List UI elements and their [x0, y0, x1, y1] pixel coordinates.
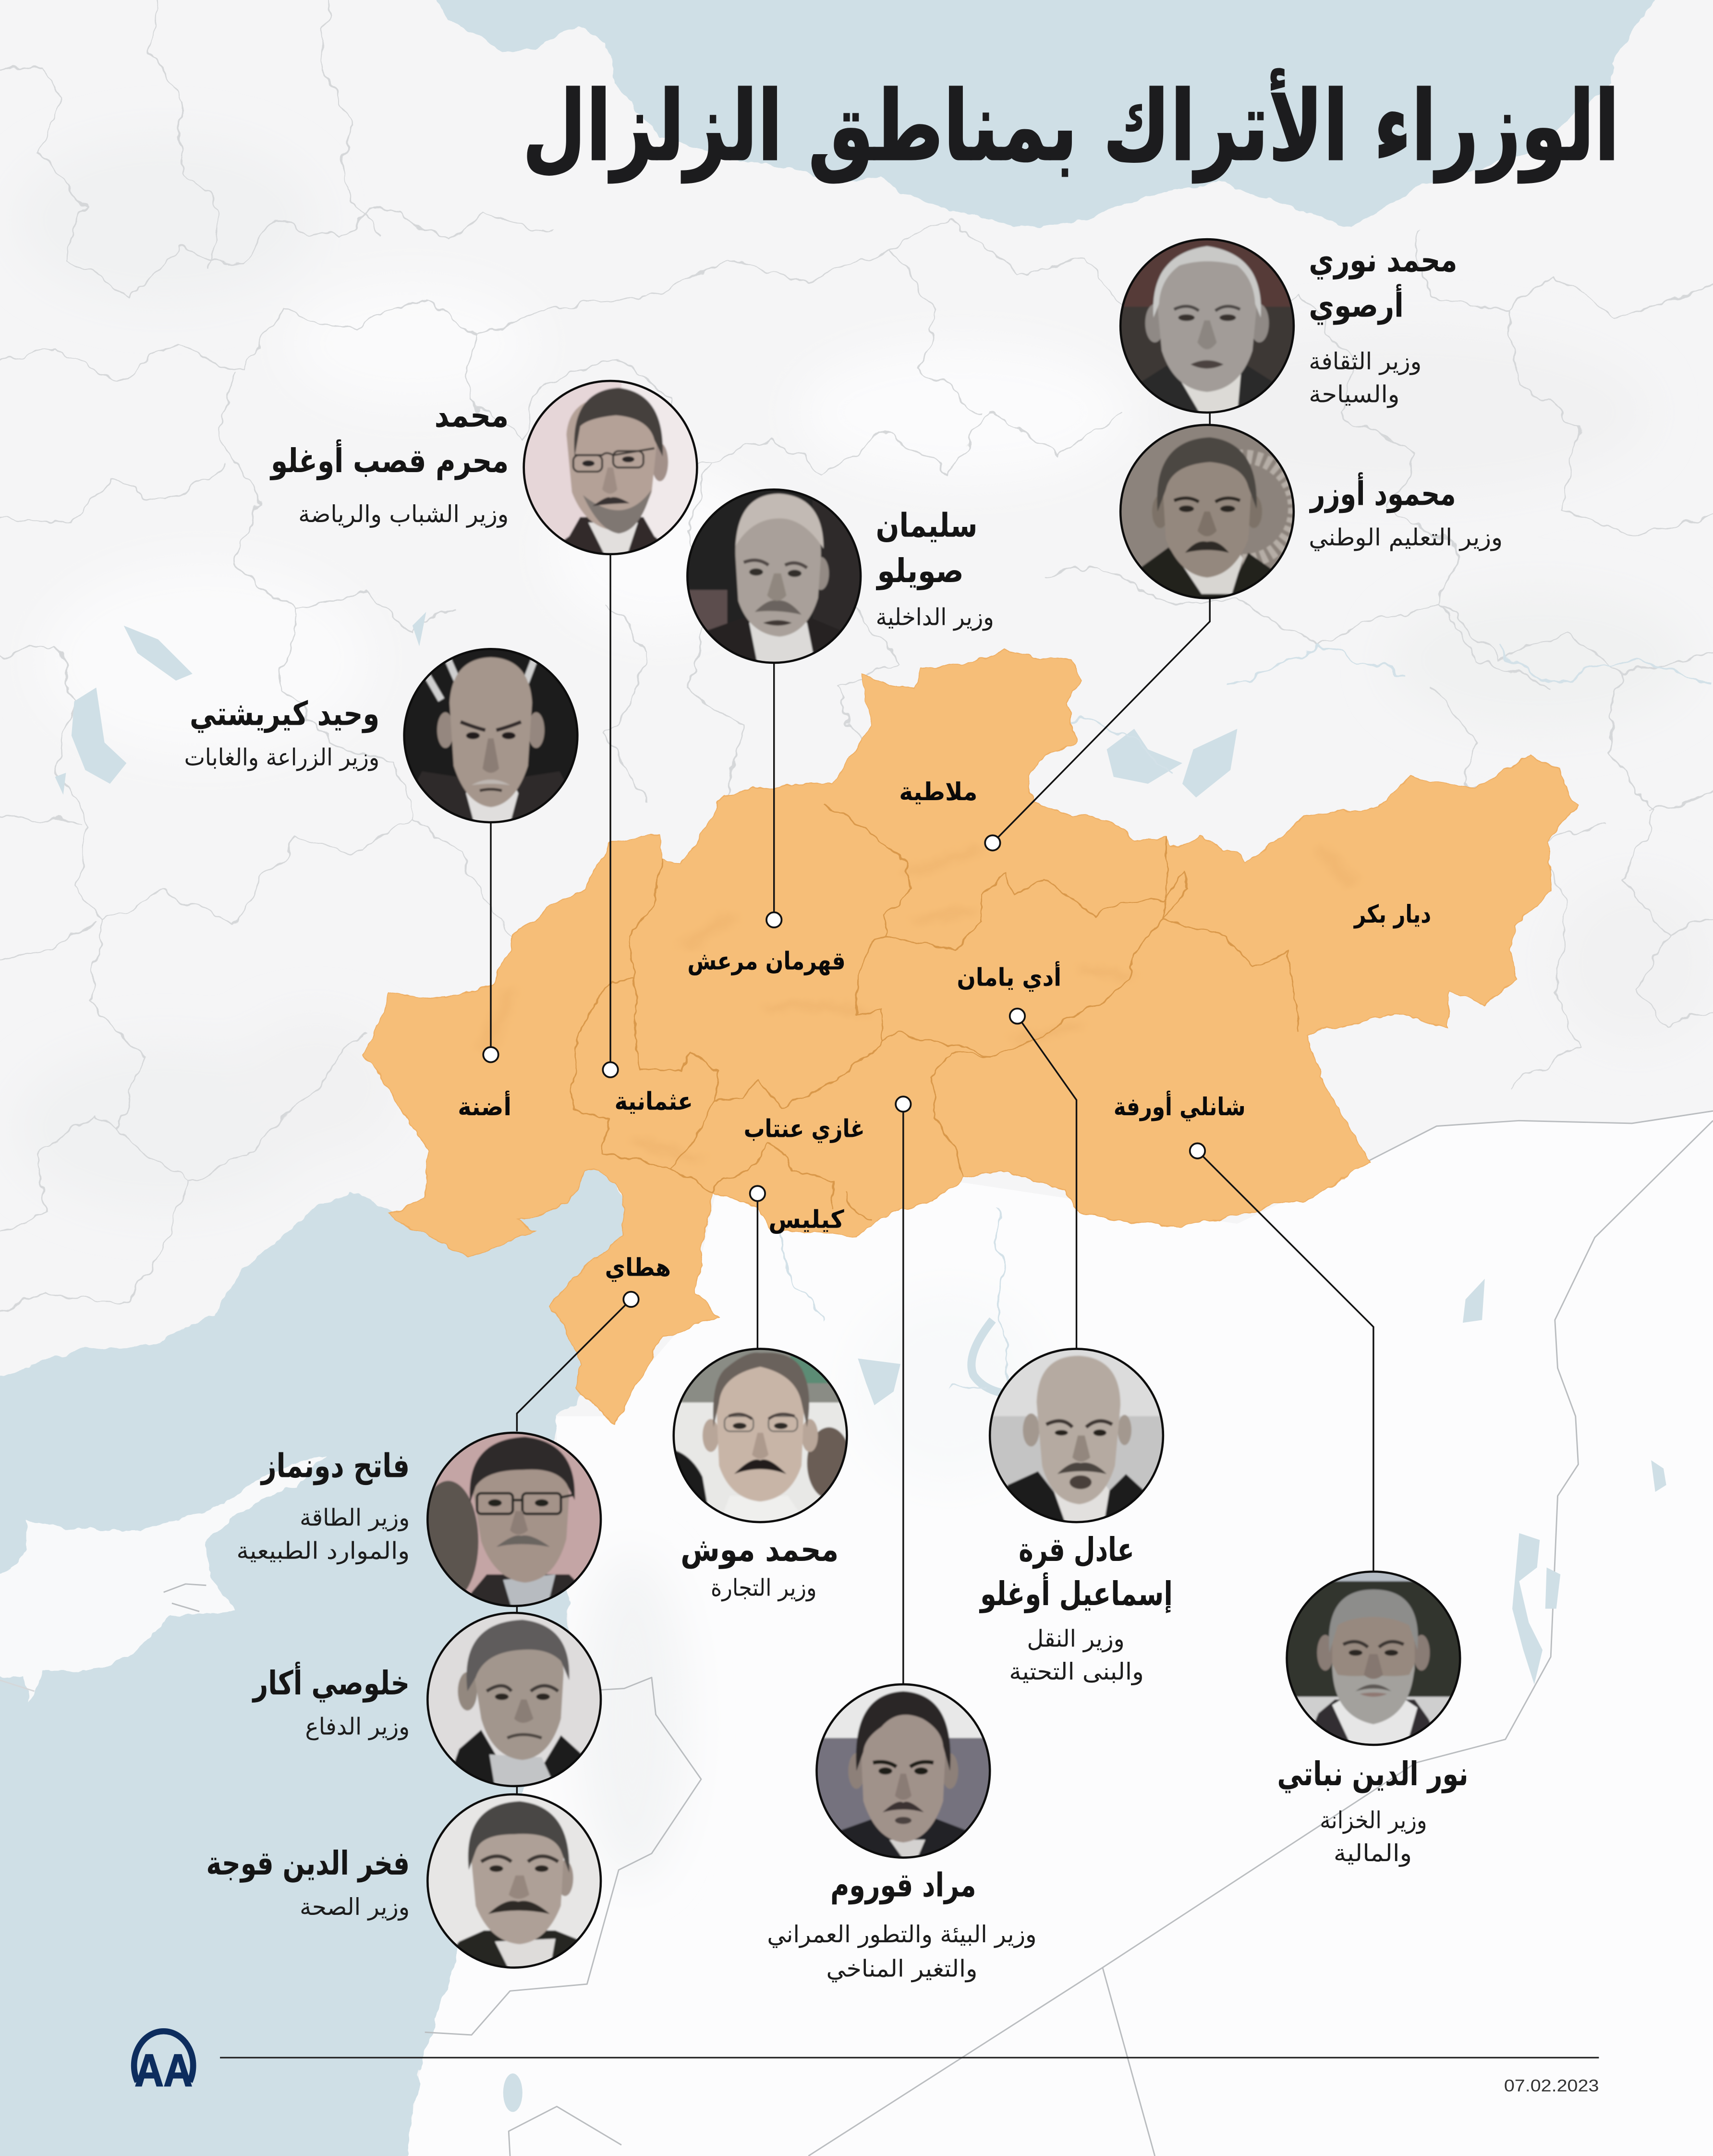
name — [269, 396, 509, 480]
portrait: soylu — [678, 488, 870, 664]
panel: adil karaismailoglu — [979, 1348, 1173, 1685]
panel: vahit kirisci — [184, 647, 587, 824]
panel: mehmet mus — [672, 1348, 851, 1602]
mediterranean sea — [0, 1162, 646, 2156]
role — [236, 1505, 410, 1564]
province labels: أضنة — [458, 1090, 511, 1121]
role — [1009, 1626, 1144, 1685]
role: والسياحة — [1309, 381, 1399, 408]
name — [1309, 241, 1458, 325]
role: وزير التعليم الوطني — [1309, 524, 1503, 551]
name: إسماعيل أوغلو — [979, 1572, 1173, 1613]
province labels — [458, 778, 1431, 1282]
syria and iraq borders — [0, 1121, 1713, 2156]
name: وحيد كيريشتي — [190, 695, 379, 733]
portrait: nebati — [1286, 1570, 1461, 1752]
role: وزير الشباب والرياضة — [298, 501, 509, 528]
panel: mehmet nuri ersoy — [1111, 238, 1458, 414]
portrait: kirisci — [395, 647, 587, 824]
turkey south border — [1369, 1111, 1713, 1160]
panel: fatih donmez — [236, 1431, 602, 1608]
role: والمالية — [1334, 1840, 1412, 1867]
panel: suleyman soylu — [678, 488, 994, 664]
province labels: ملاطية — [899, 778, 977, 806]
panel: mehmet kasapoglu — [269, 379, 698, 556]
date: 07.02.2023 — [1504, 2076, 1599, 2095]
role: وزير الزراعة والغابات — [184, 744, 379, 771]
province labels: عثمانية — [615, 1087, 693, 1116]
name: عادل قرة — [1019, 1531, 1134, 1569]
province borders — [572, 804, 1300, 1218]
portrait: kurum — [807, 1683, 999, 1859]
portrait: ozer — [1111, 424, 1303, 599]
name: سليمان — [876, 506, 977, 545]
portrait: akar — [426, 1611, 602, 1788]
name: أرصوي — [1309, 283, 1404, 325]
province labels: غازي عنتاب — [744, 1115, 865, 1144]
portrait: mus — [672, 1348, 851, 1523]
panel: murat kurum — [767, 1683, 1037, 1983]
portrait: donmez — [418, 1431, 602, 1608]
name: نور الدين نباتي — [1277, 1755, 1468, 1793]
name: محمود أوزر — [1309, 472, 1456, 513]
role — [1309, 348, 1421, 408]
name — [979, 1531, 1173, 1613]
province map — [365, 650, 1577, 1424]
province labels: شانلي أورفة — [1114, 1090, 1246, 1121]
panel: hulusi akar — [252, 1611, 602, 1788]
province labels: قهرمان مرعش — [687, 947, 846, 975]
role: وزير التجارة — [711, 1575, 816, 1602]
role: والتغير المناخي — [826, 1956, 977, 1983]
portrait: ersoy — [1111, 238, 1303, 414]
icon: anadolu agency logo: AA — [135, 2045, 193, 2096]
role: وزير الطاقة — [300, 1505, 410, 1532]
role: وزير النقل — [1027, 1626, 1125, 1653]
name: مراد قوروم — [830, 1866, 976, 1905]
name: محرم قصب أوغلو — [269, 439, 509, 480]
role: وزير الخزانة — [1320, 1807, 1427, 1834]
quake-zone provinces fill — [365, 650, 1577, 1424]
role: وزير الداخلية — [876, 604, 994, 631]
terrain shading — [14, 137, 1713, 1210]
province labels: أدي يامان — [957, 961, 1061, 992]
name: محمد — [435, 396, 509, 435]
role — [1320, 1807, 1427, 1867]
role: وزير الصحة — [300, 1894, 410, 1921]
name: صويلو — [876, 552, 964, 590]
lakes and rivers — [55, 612, 1713, 2112]
panel: nureddin nebati — [1277, 1570, 1468, 1867]
role — [767, 1921, 1037, 1983]
name: محمد موش — [680, 1531, 838, 1569]
province labels: ديار بكر — [1353, 900, 1431, 929]
coastal terrain — [577, 1292, 1045, 1884]
leader lines and location dots — [483, 413, 1373, 1794]
province labels: كيليس — [768, 1206, 844, 1234]
name: خلوصي أكار — [252, 1661, 410, 1703]
name: محمد نوري — [1309, 241, 1458, 280]
administrative boundaries — [0, 0, 1713, 1320]
role: وزير الدفاع — [305, 1714, 410, 1741]
role: والموارد الطبيعية — [236, 1537, 410, 1564]
portrait: karaismailoglu — [988, 1348, 1165, 1523]
black sea — [435, 0, 1664, 227]
relief shading — [485, 848, 1353, 1160]
name — [876, 506, 977, 590]
role: وزير البيئة والتطور العمراني — [767, 1921, 1037, 1948]
name: فاتح دونماز — [260, 1447, 410, 1486]
footer rule — [220, 2057, 1599, 2058]
role: وزير الثقافة — [1309, 348, 1421, 375]
role: والبنى التحتية — [1009, 1658, 1144, 1685]
panel: mahmut ozer — [1111, 424, 1503, 599]
cyprus — [0, 1453, 326, 1703]
name: فخر الدين قوجة — [206, 1844, 410, 1883]
land south of the border — [406, 1111, 1713, 2156]
province labels: هطاي — [605, 1254, 671, 1282]
portrait: koca — [426, 1793, 602, 1969]
portrait: kasapoglu — [522, 379, 698, 556]
panel: fahrettin koca — [206, 1793, 602, 1969]
